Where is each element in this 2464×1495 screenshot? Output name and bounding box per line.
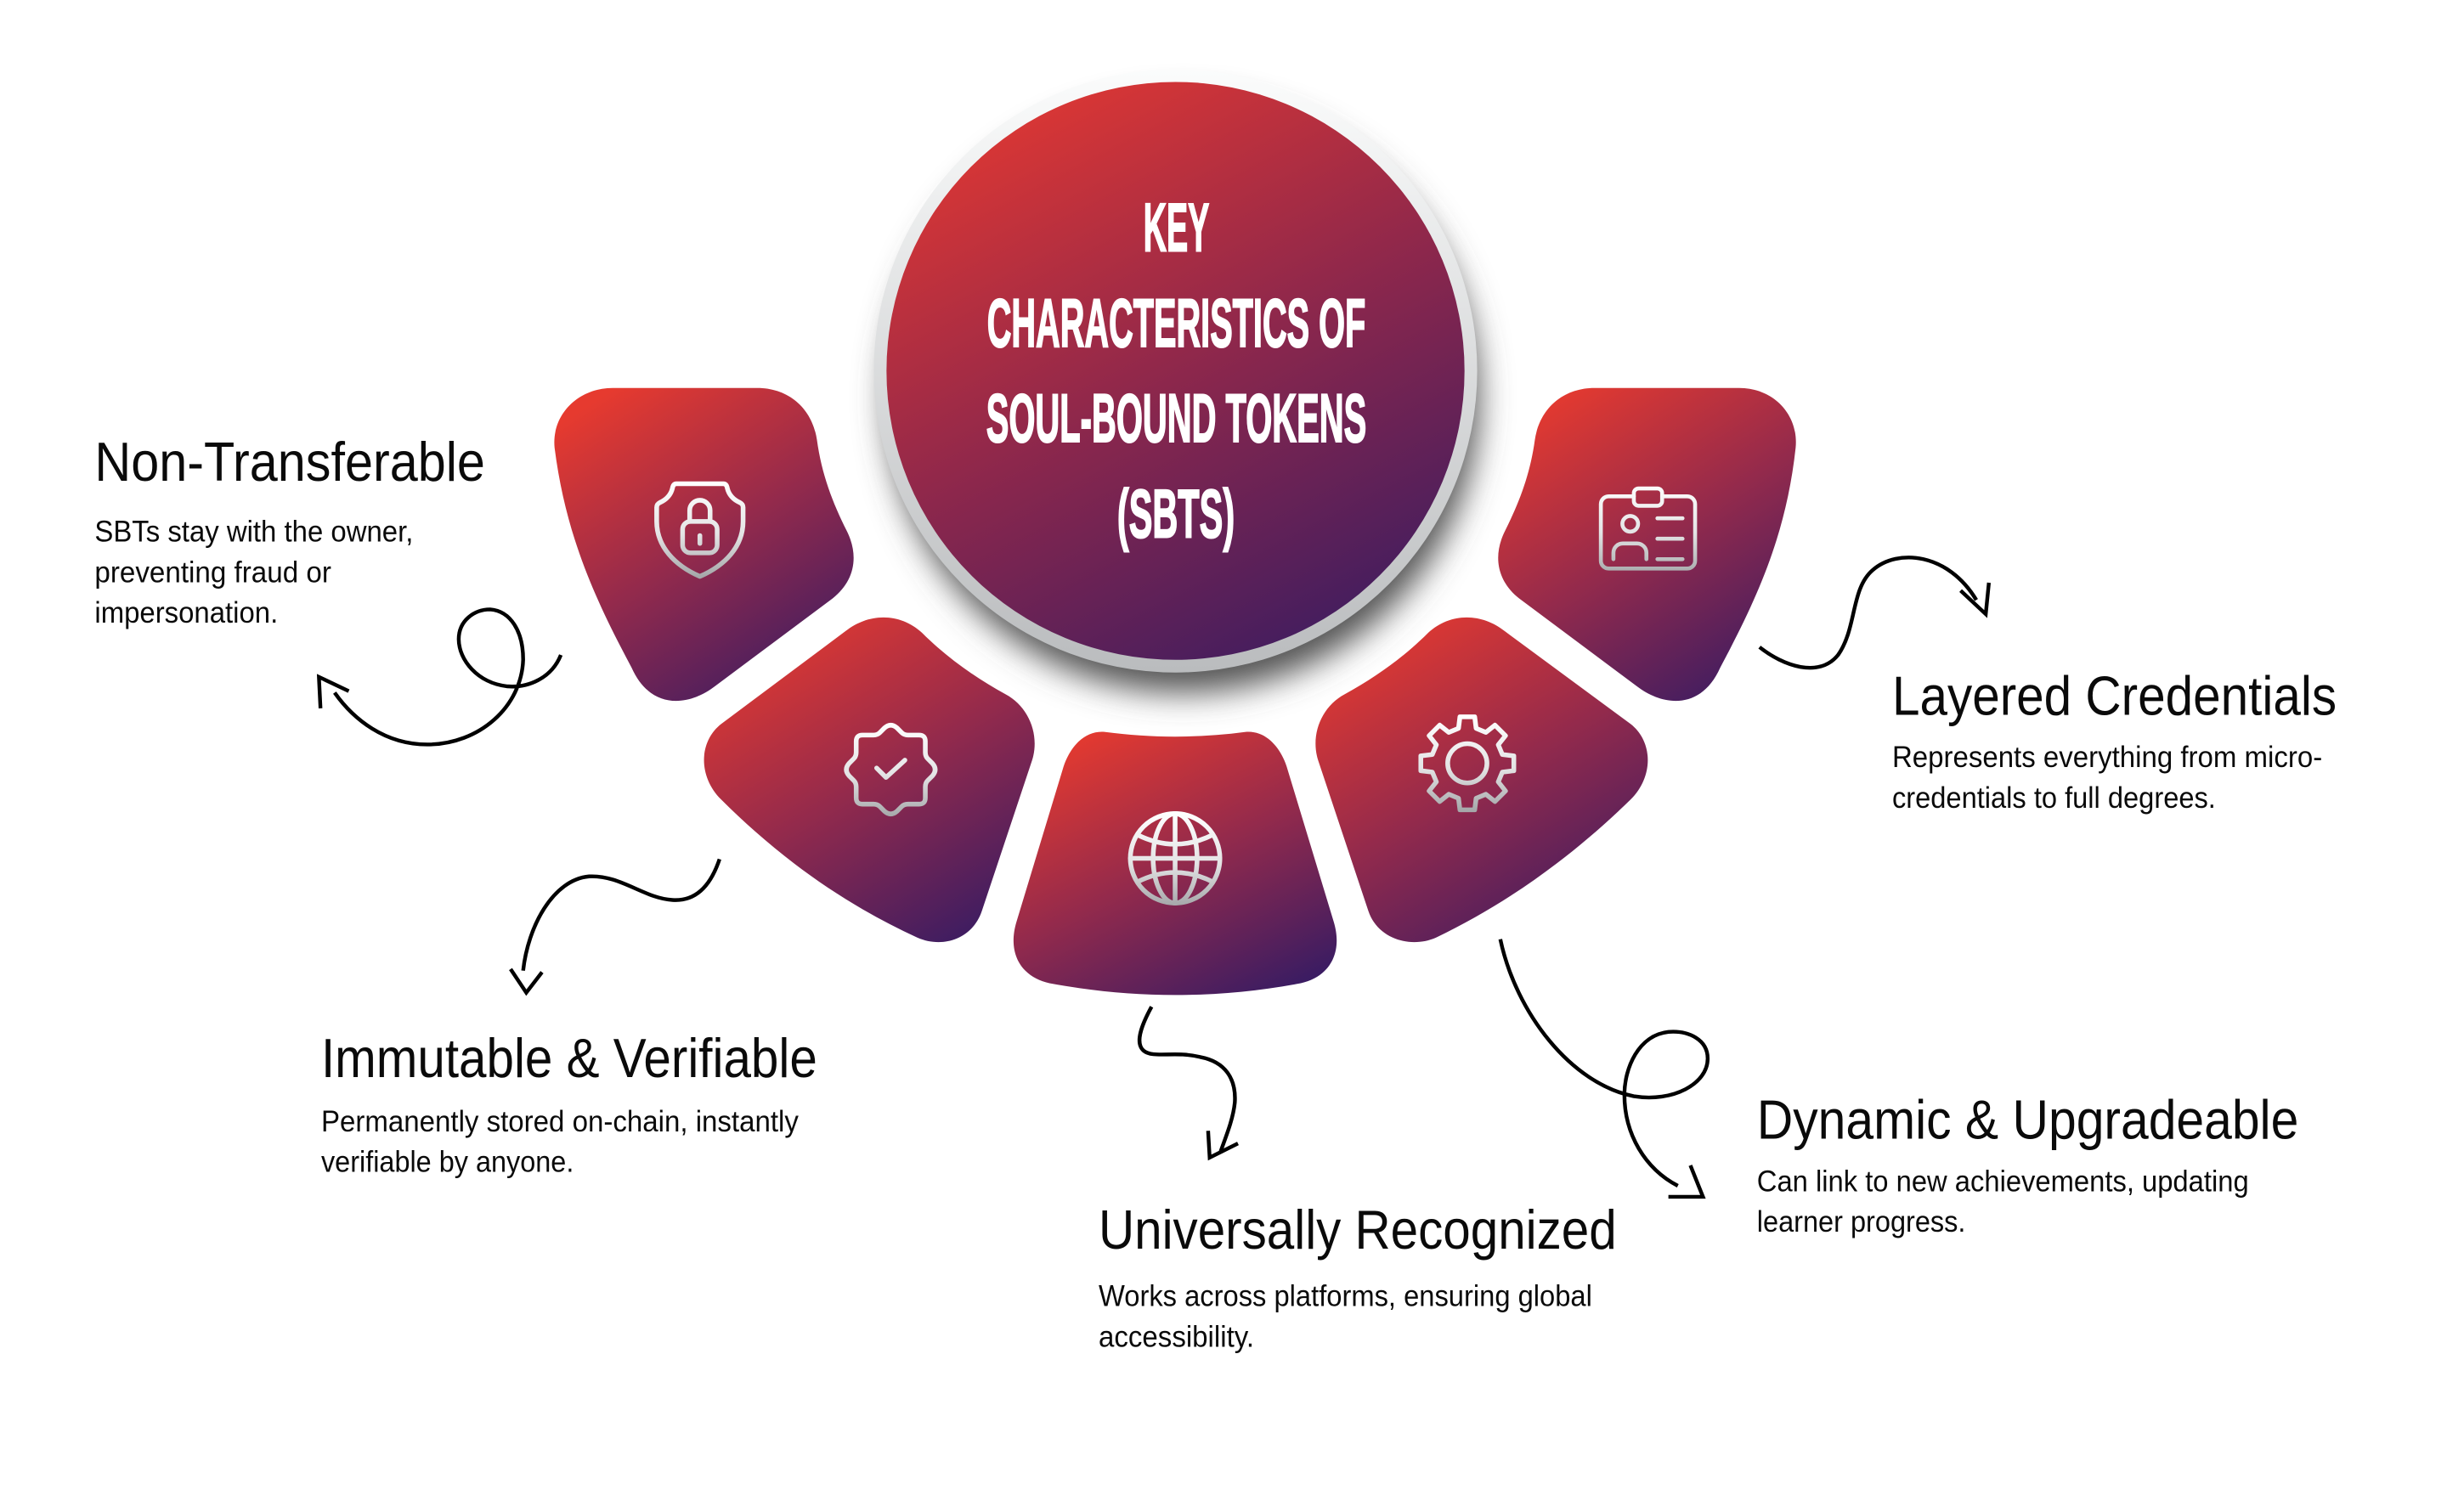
text block: non-transferable: impersonation. — [94, 596, 278, 629]
petal: layered credentials — [1498, 388, 1796, 701]
text block: immutable and verifiable: Permanently stored on-chain, instantly — [321, 1105, 799, 1138]
icon: id card — [1601, 488, 1695, 568]
text block: layered credentials: credentials to full degrees. — [1892, 781, 2216, 815]
icon: shield with padlock — [657, 484, 743, 577]
text block: dynamic and upgradeable: Can link to new achievements, updating — [1757, 1165, 2249, 1198]
central circle — [873, 70, 1479, 693]
petal: dynamic and upgradeable — [1315, 618, 1647, 942]
title: KEY — [1144, 189, 1209, 266]
text block: universally recognized: Works across platforms, ensuring global — [1099, 1280, 1592, 1313]
petal: immutable and verifiable — [704, 618, 1035, 942]
text block: immutable and verifiable: Immutable & Verifiable — [321, 1027, 817, 1089]
arrow: to non-transferable — [319, 609, 561, 744]
text block: dynamic and upgradeable: learner progress. — [1757, 1205, 1965, 1238]
text block: dynamic and upgradeable: Dynamic & Upgradeable — [1757, 1089, 2298, 1151]
circle gradient face — [886, 82, 1465, 660]
circle outer ring — [873, 70, 1478, 673]
text block: non-transferable — [94, 431, 485, 629]
arrow: to universally recognized — [1139, 1007, 1238, 1158]
text block: universally recognized: Universally Recognized — [1099, 1199, 1617, 1261]
text block: non-transferable: Non-Transferable — [94, 431, 485, 493]
text block: immutable and verifiable: verifiable by anyone. — [321, 1146, 574, 1179]
text block: non-transferable: preventing fraud or — [94, 556, 331, 589]
arrow: to dynamic and upgradeable — [1500, 939, 1708, 1197]
text block: non-transferable: SBTs stay with the owner, — [94, 516, 413, 549]
text block: layered credentials: Represents everything from micro- — [1892, 741, 2322, 774]
icon: globe — [1130, 814, 1220, 903]
petal: non-transferable — [554, 388, 854, 701]
icon: verified badge — [846, 725, 935, 814]
text: CHARACTERISTICS OF — [987, 285, 1365, 362]
arrow: to immutable and verifiable — [511, 859, 720, 993]
text block: dynamic and upgradeable — [1757, 1089, 2298, 1238]
circle drop shadow — [887, 101, 1479, 693]
arrow: to layered credentials — [1760, 557, 1989, 668]
text block: layered credentials — [1892, 664, 2337, 815]
icon: gear — [1421, 717, 1514, 810]
text block: layered credentials: Layered Credentials — [1892, 664, 2337, 726]
text: SOUL-BOUND TOKENS — [986, 381, 1366, 457]
text block: universally recognized: accessibility. — [1099, 1320, 1254, 1353]
title: (SBTS) — [1117, 477, 1235, 553]
text block: immutable and verifiable — [321, 1027, 817, 1179]
title — [986, 189, 1366, 553]
petal: universally recognized — [1014, 732, 1337, 995]
text block: universally recognized — [1099, 1199, 1617, 1353]
